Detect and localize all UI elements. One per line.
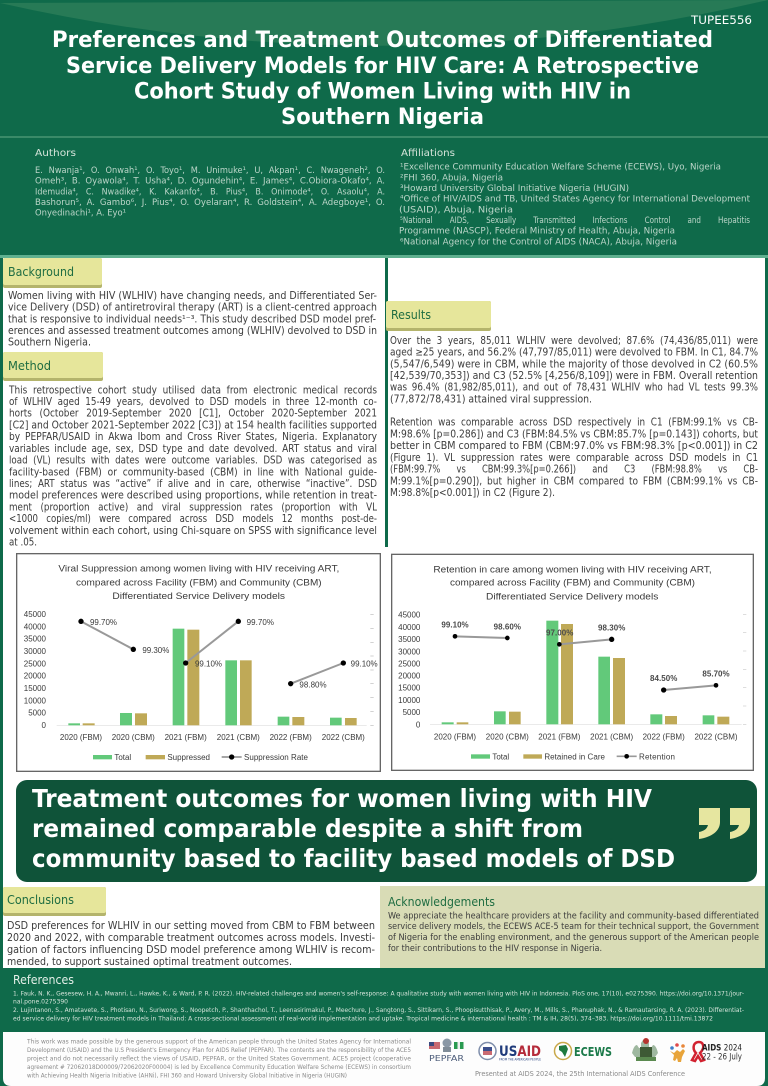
text: method: This retrospective cohort study utilised data from electronic medical records [8,384,377,396]
affiliations: ²FHI 360, Abuja, Nigeria [400,173,503,183]
x axis labels: 2022 (FBM) [270,733,312,742]
x axis labels: 2020 (FBM) [434,732,476,741]
logo: PEPFAR: PEPFAR [429,1054,464,1063]
legend: Retained in Care [544,752,606,761]
data labels: 84.50% [650,674,677,683]
text: method: variables include age, sex, DSD type and date devolved. ART status and viral [9,443,377,455]
data labels: 99.10% [351,659,378,668]
callout [16,780,757,882]
logo: USAID [479,1042,541,1062]
text: acknowledgements: of Nigeria for the enabling environment, and the generous support of the American people [388,932,759,943]
y axis labels: 5000 [403,708,421,717]
legend: Retention [639,752,675,761]
text: results: (Figure 1). VL suppression rates were comparable across DSD models in C1 [390,452,758,464]
heading: references: References [13,973,74,987]
text: background [8,290,377,349]
heading: results: Results [391,307,431,322]
data labels: 99.10% [195,660,222,669]
logo: ECEWS: ECEWS [574,1044,612,1059]
chart: viral suppression [17,554,380,771]
x axis labels: 2021 (FBM) [538,732,581,741]
x axis labels: 2022 (CBM) [694,732,738,741]
retention lines [455,636,716,690]
panel: references [0,968,768,1032]
bars [68,629,357,725]
y axis labels [398,611,421,729]
text: results: M:98.8%[p<0.001]) in C2 (Figure 2). [390,487,555,499]
callout text: community based to facility based models of DSD [32,844,675,873]
text: method: [C2] and October 2021-September 2022 [C3]) at 154 health facilities supported [9,419,377,431]
text: method: facility-based (FBM) or community-based (CBM) in line with National guide- [9,466,377,478]
text: results: (77,872/78,431) attained viral suppression. [390,393,592,405]
data labels: 99.70% [90,618,117,627]
data labels [441,621,730,683]
heading: conclusions: Conclusions [7,892,74,907]
title: Service Delivery Models for HIV Care: A Retrospective [66,54,699,79]
poster code: TUPEE556 [690,13,752,27]
x axis labels: 2021 (FBM) [165,733,207,742]
affiliations: Affiliations [401,148,455,159]
callout text [32,784,675,873]
logo: AIDS 2024 [670,1042,742,1062]
x axis labels [434,732,738,741]
x axis labels: 2022 (FBM) [643,732,685,741]
funding statement: Development (USAID) and the U.S President's Emergency Plan for AIDS Relief (PEPFAR). The contents are the responsibility of the ACE5 [27,1047,411,1054]
y axis labels: 15000 [24,684,47,693]
data labels: 99.70% [247,618,274,627]
affiliations [399,148,750,247]
text: results: better in CBM compared to FBM (CBM:97.0% vs FBM:98.3% [p<0.001]) in C2 [390,440,758,452]
y axis labels: 35000 [398,635,421,644]
affiliations: ⁵National AIDS, Sexually Transmitted Infections Control and Hepatitis [400,216,750,226]
affiliations: Programme (NASCP), Federal Ministry of Health, Abuja, Nigeria [399,227,675,237]
logo: USAID: FROM THE AMERICAN PEOPLE [499,1058,541,1062]
text: results: Over the 3 years, 85,011 WLHIV were devolved; 87.6% (74,436/85,011) were [390,335,758,347]
data labels: 98.80% [299,680,327,689]
y axis labels: 0 [416,720,421,729]
data labels: 98.30% [598,623,625,632]
panel: footer [3,1032,765,1086]
y axis labels: 15000 [398,684,421,693]
authors: Bashorun⁵, A. Gambo⁶, J. Pius⁴, O. Oyelaran⁴, R. Goldstein⁴, A. Adegboye¹, O. [35,198,385,208]
bars [442,621,729,724]
data labels: 98.60% [494,622,521,631]
text: method [8,384,378,548]
text: references: ed service delivery for HIV treatment models in Thailand: A cross-sectional assessment of real-world implementation and uptake. Tropical medicine & international health : TM & IH, 28(5), 374–383. https://doi.org/10.1111/tmi.13872 [13,1014,713,1022]
authors: Authors [35,148,76,159]
text: acknowledgements [388,910,760,954]
text: method: by PEPFAR/USAID in Akwa Ibom and Cross River States, Nigeria. Explanatory [9,431,378,443]
header [0,0,768,138]
affiliations: ¹Excellence Community Education Welfare Scheme (ECEWS), Uyo, Nigeria [400,163,721,173]
chart title [433,564,712,602]
panel: conclusions [3,887,375,968]
funding statement: This work was made possible by the generous support of the American people through the United States Agency for International [26,1038,411,1046]
text: background: Women living with HIV (WLHIV) have changing needs, and Differentiated Ser- [8,290,377,302]
heading: method: Method [8,358,51,373]
logo: ECEWS [554,1042,612,1060]
title: Preferences and Treatment Outcomes of Differentiated [52,28,713,53]
text: results: aged ≥25 years, and 56.2% (47,797/85,011) were devolved to FBM. In C1, 84.7% [390,347,758,359]
text: conclusions: DSD preferences for WLHIV in our setting moved from CBM to FBM between [7,920,375,932]
logo: Nigeria coat of arms [632,1038,658,1061]
chart title: Retention in care among women living with HIV receiving ART, [433,564,712,574]
y axis labels: 35000 [24,635,47,644]
x axis labels [60,733,365,742]
chart title: compared across Facility (FBM) and Community (CBM) [450,578,695,588]
y axis labels: 40000 [24,622,47,631]
y axis labels [24,610,47,730]
x axis labels: 2021 (CBM) [590,732,634,741]
logo: PEPFAR [429,1038,464,1063]
authors: E. Nwanja¹, O. Onwah¹, O. Toyo¹, M. Unimuke¹, U, Akpan¹, C. Nwageneh², O. [35,166,385,176]
funding statement: agreement # 72062018D00009/72062020F00004) is led by Excellence Community Education Welfare Scheme (ECEWS) in consortium [27,1064,411,1071]
funding statement [26,1038,412,1079]
chart: retention in care [392,554,753,770]
y axis labels: 0 [42,721,47,730]
text: references: 1. Fauk, N. K., Gesesew, H. A., Mwanri, L., Hawke, K., & Ward, P. R. (2022). HIV-related challenges and women's self-response: A qualitative study with women living with HIV in Indonesia. PloS one, 17(10), e0275390. https://doi.org/10.1371/jour- [13,990,744,998]
text: background: Southern Nigeria. [8,337,91,349]
text: conclusions: gation of factors influencing DSD model preference among WLHIV is recom- [7,944,375,956]
panel: acknowledgements [380,886,765,968]
x axis labels: 2020 (CBM) [112,733,155,742]
text: results: M:98.6% [p=0.286]) and C3 (FBM:84.5% vs CBM:85.7% [p=0.143]) cohorts, but [390,428,758,440]
y axis labels: 45000 [398,611,421,620]
chart title: compared across Facility (FBM) and Community (CBM) [76,577,322,587]
suppression rate lines [81,621,343,684]
text: results: [42,539/70,353]) and C3 (52.5% [4,256/8,109]) were in FBM. Overall retention [390,370,758,382]
text: method: volvement within each cohort, using Chi-square on SPSS with significance level [9,525,377,537]
funding statement: with Achieving Health Nigeria Initiative (AHNi), FHI 360 and Howard University Global Initiative in Nigeria (HUGIN) [27,1072,347,1079]
y axis labels: 45000 [24,610,47,619]
y axis labels: 30000 [24,647,47,656]
y axis labels: 25000 [398,659,421,668]
title: Southern Nigeria [281,105,484,130]
data labels: 99.10% [441,621,469,630]
y axis labels: 20000 [24,672,47,681]
text: method: ment (proportion active) and viral suppression rates (proportion with VL [9,501,378,513]
text: acknowledgements: We appreciate the healthcare providers at the facility and community-based differentiated [388,910,759,922]
funding statement: project and do not necessarily reflect the views of USAID, PEPFAR, or the United States Government. ACE5 project (cooperative [27,1056,412,1062]
panel: background [3,258,377,349]
data labels: 99.30% [142,646,169,655]
heading: background [3,258,102,288]
heading: background: Background [8,264,74,279]
chart title: Differentiated Service Delivery models [112,591,286,601]
text: references: nal.pone.0275390 [13,998,68,1006]
text: references: 2. Lujintanon, S., Amatavete, S., Photisan, N., Suriwong, S., Noopetch, P., Shanthachol, T., Leenasirimakul, P., Meechure, J., Sangtong, S., Sittikarn, S., Phoopisutthisak, P., Avery, M., Mills, S., Phanuphak, N., & Ramautarsing, R. A. (2023). Differentiat- [13,1006,744,1014]
x axis labels: 2020 (CBM) [486,732,529,741]
legend: Suppressed [167,753,210,762]
text: method: model preferences were described using proportions, while retention in treat- [9,490,377,502]
text: method: load (VL) results with dates were outcome variables. DSD was categorised as [9,455,377,467]
chart title [58,563,339,601]
text: results: M:99.1%[p=0.290]), but higher in CBM compared to FBM (CBM:99.1% vs CB- [390,475,758,487]
callout text: Treatment outcomes for women living with HIV [32,784,652,813]
text: conclusions: 2020 and 2022, with comparable treatment outcomes across models. Investi- [7,932,375,944]
heading: acknowledgements: Acknowledgements [388,894,495,909]
chart title: Differentiated Service Delivery models [486,592,659,602]
y axis labels: 20000 [398,672,421,681]
text: results: (5,547/6,549) were in CBM, while the majority of those devolved in C2 (60.5% [390,358,758,370]
y axis labels: 30000 [398,647,421,656]
affiliations: (USAID), Abuja, Nigeria [399,205,513,215]
text: method: of WLHIV aged 15-49 years, devolved to DSD models in three 12-month co- [9,396,377,408]
legend [93,753,309,762]
title [52,28,713,130]
y axis labels: 25000 [24,659,47,668]
authors: Omeh³, B. Oyawola⁴, T. Usha⁴, D. Ogundehin⁴, E. James⁴, C.Obiora-Okafo⁴, A. [35,177,385,187]
y axis labels: 40000 [398,623,421,632]
callout text: remained comparable despite a shift from [32,814,583,843]
text: method: at .05. [9,536,37,548]
text: references [13,990,744,1022]
authors [35,148,385,219]
y axis labels: 10000 [398,696,421,705]
affiliations: ³Howard University Global Initiative Nigeria (HUGIN) [400,184,629,194]
heading: results [386,301,491,331]
text: acknowledgements: for their contributions to the HIV response in Nigeria. [388,943,602,954]
text: results: Retention was comparable across DSD respectively in C1 (FBM:99.1% vs CB- [390,417,758,429]
text: method: lines; ART status was “active” if alive and in care, otherwise “inactive”. DSD [9,478,377,490]
text: results [390,335,758,499]
text: background: that is responsive to individual needs¹⁻³. This study described DSD model pref- [8,313,376,325]
y axis labels: 5000 [28,709,47,718]
text: acknowledgements: service delivery models, the ECEWS ACE-5 team for their technical support, the Government [388,921,760,932]
data labels: 85.70% [702,669,730,678]
x axis labels: 2020 (FBM) [60,733,102,742]
legend [471,752,675,761]
text: conclusions [7,920,375,968]
icon: quotation marks [699,808,750,839]
y axis labels: 10000 [24,696,47,705]
logo: USAID: USAID [499,1044,541,1060]
data labels [90,618,378,689]
text: method: <1000 copies/ml) were compared across DSD models 12 months post-de- [9,513,377,525]
authors: Onyedinachi¹, A. Eyo¹ [35,209,126,219]
authors: Idemudia⁴, C. Nwadike⁴, K. Kakanfo⁴, B. Pius⁴, B. Onimode⁴, O. Asaolu⁴, A. [35,187,385,197]
panel: method [3,352,378,548]
chart title: Viral Suppression among women living with HIV receiving ART, [58,563,339,573]
title: Cohort Study of Women Living with HIV in [134,80,631,104]
panel: results [386,301,758,499]
text: results: was 96.4% (81,982/85,011), and out of 78,431 WLHIV who had VL tests 99.3% [390,382,758,394]
x axis labels: 2021 (CBM) [217,733,260,742]
affiliations: ⁴Office of HIV/AIDS and TB, United States Agency for International Development [400,195,750,205]
heading: method [3,352,103,381]
conference note: Presented at AIDS 2024, the 25th International AIDS Conference [475,1070,685,1078]
logo: AIDS 2024: 22 - 26 July [702,1052,742,1062]
legend: Total [114,753,131,762]
text: method: horts (October 2019-September 2020 [C1], October 2020-September 2021 [9,408,377,420]
logo: AIDS 2024: AIDS 2024 [702,1044,742,1054]
x axis labels: 2022 (CBM) [322,733,365,742]
legend: Suppression Rate [244,753,309,762]
affiliations: ⁶National Agency for the Control of AIDS (NACA), Abuja, Nigeria [400,237,677,247]
text: conclusions: mended, to support sustained optimal treatment outcomes. [7,956,292,968]
heading: conclusions [3,887,106,916]
text: background: erences and assessed treatment outcomes among (WLHIV) devolved to DSD in [8,325,377,337]
text: background: vice Delivery (DSD) of antiretroviral therapy (ART) is a client-centred approach [8,302,377,314]
legend: Total [492,752,509,761]
data labels: 97.00% [546,628,573,637]
